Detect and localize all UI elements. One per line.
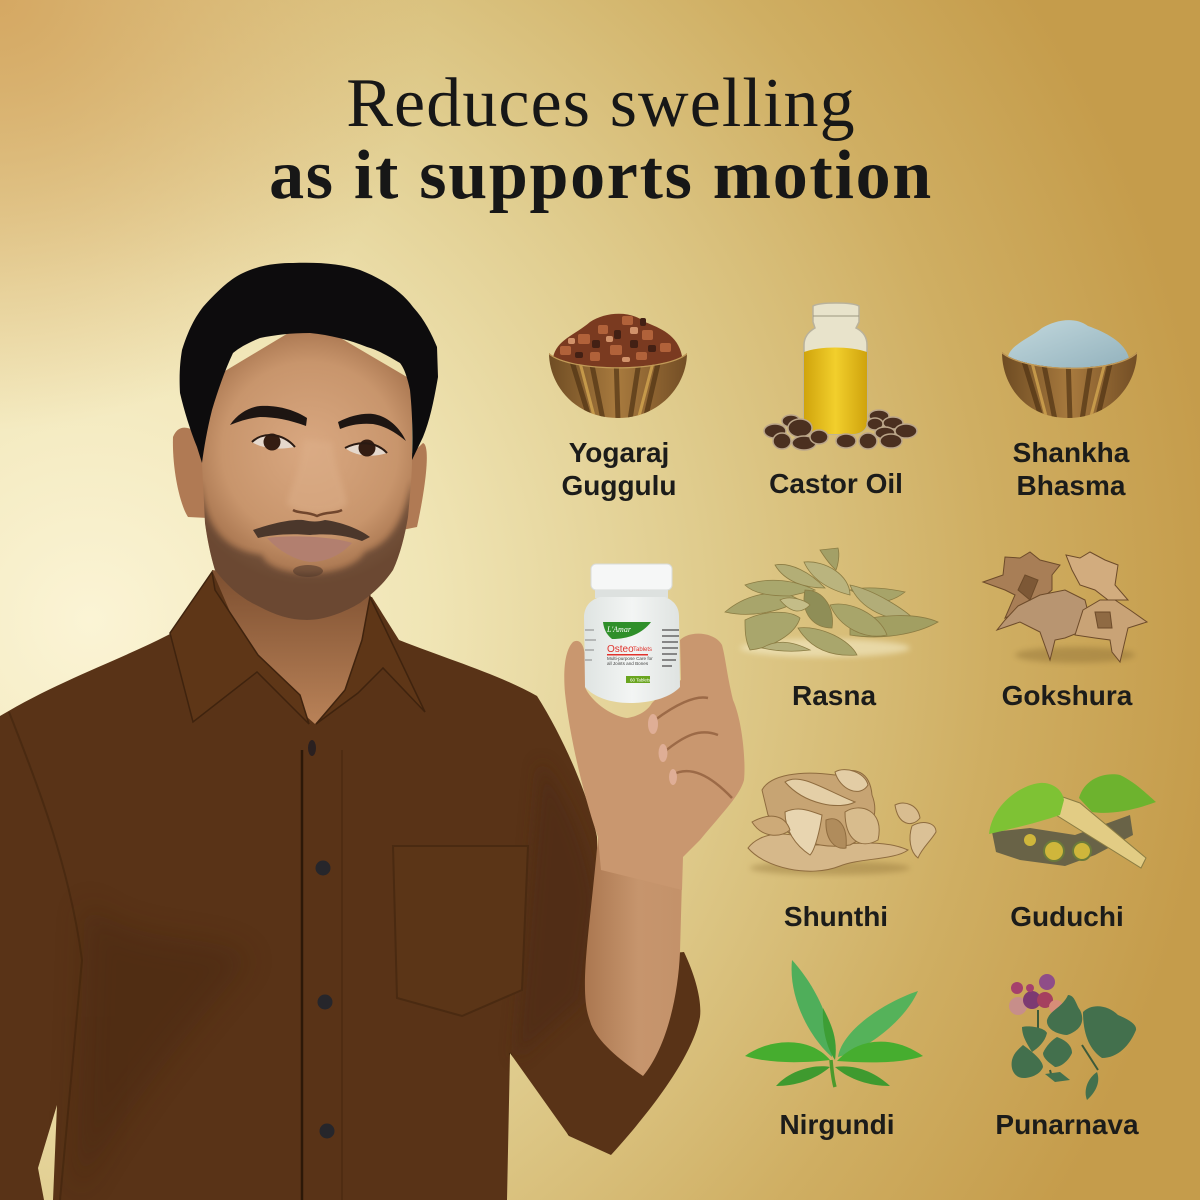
collar left [170, 572, 309, 724]
eyebrows [230, 406, 406, 441]
label: Guduchi [1010, 901, 1124, 932]
finger lines [655, 697, 732, 798]
nose [287, 440, 347, 516]
dried ginger [748, 770, 936, 871]
title: Reduces swelling [346, 65, 856, 142]
product jar: all Joints and Bones [607, 661, 649, 666]
label: Gokshura [1002, 680, 1133, 711]
product jar: Tablets [633, 647, 652, 653]
lips [267, 536, 352, 562]
label: Shankha [1013, 437, 1130, 468]
moustache [253, 520, 370, 541]
buttons [308, 740, 334, 1138]
finger nails [648, 714, 677, 785]
castor seeds [764, 410, 917, 450]
ingredient: Shankha Bhasma: Bhasma [1017, 470, 1126, 501]
soul patch [293, 565, 323, 577]
resin pile [553, 314, 682, 368]
face [202, 320, 412, 620]
ingredient: Shunthi [748, 770, 936, 932]
ingredient: Guduchi [989, 774, 1156, 932]
ingredient: Yogaraj Guggulu: Guggulu [561, 470, 677, 501]
ingredient: Rasna [725, 548, 938, 711]
label: Punarnava [995, 1109, 1139, 1140]
eyes [252, 434, 387, 456]
flowers [1009, 974, 1063, 1015]
stems [1038, 1010, 1098, 1078]
person holding product [0, 263, 745, 1200]
hand [564, 634, 745, 890]
label: Shunthi [784, 901, 888, 932]
label: Nirgundi [779, 1109, 895, 1140]
powder [1008, 320, 1129, 368]
label: Castor Oil [769, 468, 903, 499]
leaves [989, 774, 1156, 834]
ears [173, 428, 427, 530]
product jar: Multi-purpose Care for [607, 656, 653, 661]
collar right [316, 597, 425, 724]
wooden bowl [549, 353, 687, 418]
label: Yogaraj [569, 437, 669, 468]
shadow [1015, 647, 1135, 663]
bottle [804, 303, 867, 434]
neck [212, 570, 378, 724]
leaves [745, 960, 923, 1087]
shadow [750, 861, 910, 875]
shirt [0, 560, 720, 1200]
leaves [725, 548, 938, 655]
ingredient: Shankha Bhasma [1000, 320, 1140, 501]
product jar [584, 564, 680, 703]
title: as it supports motion [269, 137, 933, 214]
ingredient: Castor Oil [764, 303, 917, 499]
shadow [740, 639, 910, 657]
wooden bowl [1000, 350, 1140, 420]
label: Rasna [792, 680, 876, 711]
beard [204, 484, 410, 620]
title [269, 65, 933, 214]
product jar: L'Amar [606, 625, 632, 634]
product jar: Osteo [607, 644, 634, 655]
ingredient: Gokshura [983, 552, 1147, 711]
spiky fruits [983, 552, 1147, 662]
ingredient: Yogaraj Guggulu [545, 314, 690, 501]
forearm [585, 837, 682, 1076]
product jar: 60 Tablets [630, 678, 651, 682]
bark stems [992, 796, 1146, 868]
ingredient: Punarnava [995, 974, 1139, 1140]
ingredient: Nirgundi [745, 960, 923, 1140]
pocket [393, 846, 528, 1016]
leaves [1012, 995, 1136, 1100]
hair [180, 263, 438, 463]
